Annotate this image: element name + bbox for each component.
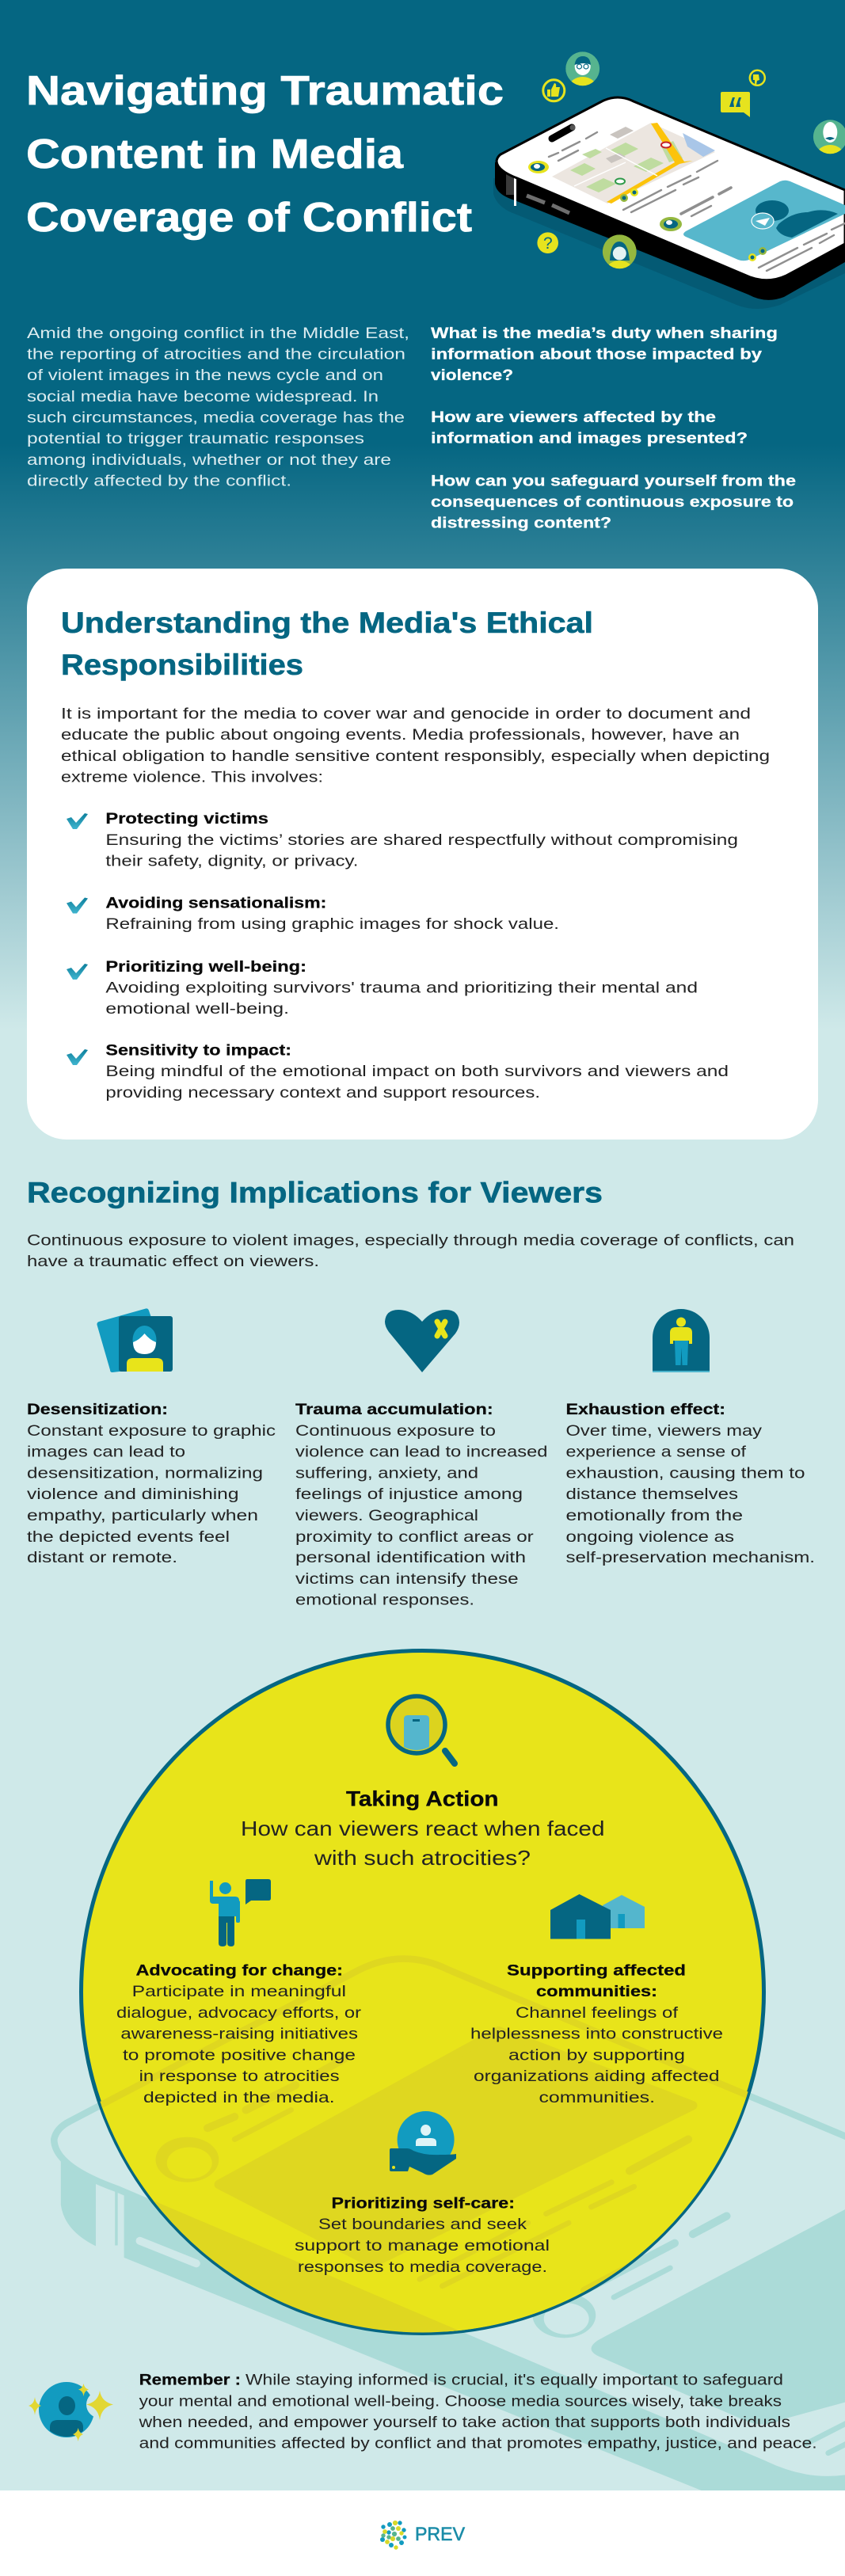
column: desensitization: empathy, particularly when: [27, 1507, 258, 1524]
column: trauma accumulation: emotional responses.: [295, 1592, 474, 1609]
icon: houses: [550, 1894, 645, 1939]
column: desensitization: desensitization, normalizing: [27, 1465, 263, 1482]
item: protecting victims: Protecting victims: [105, 810, 268, 828]
remember text: when needed, and empower yourself to take action that supports both individuals: [138, 2414, 790, 2431]
column: trauma accumulation: feelings of injustice among: [295, 1486, 523, 1503]
column: trauma accumulation: personal identification with: [295, 1549, 526, 1566]
block: supporting affected communities: communities:: [536, 1983, 657, 2000]
notch: [552, 127, 572, 139]
block: supporting affected communities: organizations aiding affected: [474, 2068, 719, 2085]
block: supporting affected communities: Channel feelings of: [516, 2004, 679, 2022]
column: exhaustion effect: emotionally from the: [565, 1507, 743, 1524]
intro text: of violent images in the news cycle and on: [27, 367, 383, 384]
block: advocating for change: awareness-raising initiatives: [120, 2026, 358, 2043]
block: advocating for change: dialogue, advocacy efforts, or: [116, 2004, 362, 2022]
intro text: Amid the ongoing conflict in the Middle East,: [27, 325, 409, 342]
icon: question mark: ?: [543, 234, 553, 253]
block: advocating for change: depicted in the media.: [143, 2089, 335, 2106]
item: avoiding sensationalism: Avoiding sensationalism:: [105, 894, 326, 911]
intro text: the reporting of atrocities and the circulation: [27, 346, 405, 363]
item: sensitivity to impact: Being mindful of the emotional impact on both survivors and viewers and: [105, 1063, 729, 1080]
item: sensitivity to impact: Sensitivity to impact:: [105, 1042, 291, 1060]
logo: PREV: [380, 2521, 465, 2550]
block: advocating for change: to promote positive change: [123, 2047, 356, 2064]
taking action heading: [241, 1786, 605, 1870]
key questions: information and images presented?: [431, 430, 748, 447]
key questions: How can you safeguard yourself from the: [431, 472, 796, 489]
icon: thumbs up: [543, 80, 565, 101]
column: exhaustion effect: exhaustion, causing them to: [565, 1465, 805, 1482]
side buttons: [527, 196, 569, 213]
map: [552, 123, 715, 204]
column: desensitization: images can lead to: [27, 1444, 185, 1461]
item: protecting victims: their safety, dignity, or privacy.: [105, 853, 358, 870]
column: exhaustion effect: [565, 1401, 815, 1566]
icon: person with sparkles: [29, 2382, 113, 2441]
background phone watermark: [54, 1959, 845, 2536]
phone body: [495, 162, 845, 300]
illustration: isometric phone: [493, 97, 845, 309]
icon: exhausted person in arch: [653, 1309, 710, 1372]
column: desensitization: distant or remote.: [27, 1549, 177, 1566]
icon: advocate with speech bubble: [210, 1879, 271, 1946]
column: exhaustion effect: self-preservation mechanism.: [565, 1549, 815, 1566]
column: exhaustion effect: ongoing violence as: [565, 1528, 734, 1546]
column: exhaustion effect: distance themselves: [565, 1486, 738, 1503]
column: desensitization: [27, 1401, 276, 1566]
intro text: [27, 325, 409, 489]
title: Coverage of Conflict: [26, 195, 472, 241]
remember text: [138, 2371, 817, 2452]
phone shadow: [493, 178, 845, 309]
item: protecting victims: [67, 810, 738, 870]
intro text: such circumstances, media coverage has the: [27, 409, 405, 426]
icon: question mark: [537, 232, 558, 253]
item: prioritizing well-being: emotional well-being.: [105, 1000, 289, 1018]
intro text: potential to trigger traumatic responses: [27, 430, 364, 447]
column: trauma accumulation: Continuous exposure to: [295, 1422, 496, 1440]
column: trauma accumulation: suffering, anxiety, and: [295, 1465, 478, 1482]
column: trauma accumulation: [295, 1401, 547, 1609]
block: supporting affected communities: communities.: [539, 2089, 655, 2106]
panel: ethical responsibilities: [27, 569, 818, 1140]
block: advocating for change: Advocating for change:: [136, 1961, 343, 1979]
block: advocating for change: in response to atrocities: [139, 2068, 340, 2085]
phone screen: [497, 97, 845, 280]
key questions: What is the media’s duty when sharing: [431, 325, 778, 342]
icon: photo cards: [97, 1308, 173, 1372]
block: supporting affected communities: [470, 1961, 723, 2106]
icon: heart with bandage: [385, 1310, 459, 1372]
circle: taking action background: [81, 1650, 763, 2333]
logo: PREV: PREV: [415, 2524, 465, 2545]
intro paragraph: ethical obligation to handle sensitive content responsibly, especially when depicting: [61, 748, 770, 765]
remember text: and communities affected by conflict and that promotes empathy, justice, and peace.: [139, 2434, 817, 2452]
intro text: among individuals, whether or not they are: [27, 451, 391, 469]
column: exhaustion effect: Exhaustion effect:: [565, 1401, 725, 1418]
implications intro: Continuous exposure to violent images, especially through media coverage of conflicts, can: [27, 1232, 794, 1250]
heading: implications for viewers: Recognizing Implications for Viewers: [27, 1177, 603, 1208]
block: supporting affected communities: helplessness into constructive: [470, 2026, 723, 2043]
column: trauma accumulation: viewers. Geographical: [295, 1507, 478, 1524]
intro text: social media have become widespread. In: [27, 388, 379, 405]
post avatars: [528, 161, 767, 261]
column: exhaustion effect: Over time, viewers may: [565, 1422, 762, 1440]
block: prioritizing self-care: Prioritizing self-care:: [331, 2195, 515, 2213]
remember text: Remember :: [139, 2371, 241, 2388]
key questions: consequences of continuous exposure to: [431, 493, 794, 511]
heading: Understanding the Media's Ethical: [61, 607, 593, 639]
key questions: distressing content?: [431, 515, 611, 532]
column: desensitization: violence and diminishing: [27, 1486, 239, 1503]
column: desensitization: Constant exposure to graphic: [27, 1422, 276, 1440]
title: Navigating Traumatic: [26, 68, 504, 114]
item: protecting victims: Ensuring the victims’ stories are shared respectfully without compromising: [105, 831, 738, 849]
intro paragraph: educate the public about ongoing events. Media professionals, however, have an: [61, 726, 740, 744]
title: [26, 68, 504, 241]
column: exhaustion effect: experience a sense of: [565, 1444, 747, 1461]
icon: avatar with mask: [602, 234, 637, 269]
icon: avatar with glasses: [565, 51, 600, 86]
icon: hand holding person: [390, 2111, 456, 2175]
title: Content in Media: [26, 131, 404, 177]
implications intro: have a traumatic effect on viewers.: [27, 1253, 319, 1270]
column: desensitization: the depicted events feel: [27, 1528, 230, 1546]
watermark inside circle: [100, 1956, 748, 2333]
column: trauma accumulation: Trauma accumulation:: [295, 1401, 493, 1418]
item: avoiding sensationalism: Refraining from using graphic images for shock value.: [105, 915, 559, 933]
placeholder text lines: [549, 132, 845, 271]
column: trauma accumulation: violence can lead to increased: [295, 1444, 547, 1461]
key questions: [431, 325, 796, 532]
intro paragraph: It is important for the media to cover war and genocide in order to document and: [61, 705, 751, 722]
taking action heading: Taking Action: [346, 1786, 499, 1810]
item: prioritizing well-being: [67, 958, 698, 1018]
implications intro: [27, 1232, 794, 1270]
item: sensitivity to impact: [67, 1042, 729, 1102]
video panel: [683, 181, 845, 261]
item: prioritizing well-being: Avoiding exploiting survivors' trauma and prioritizing their mental and: [105, 980, 698, 997]
column: trauma accumulation: proximity to conflict areas or: [295, 1528, 534, 1546]
heading: Responsibilities: [61, 649, 303, 681]
column: desensitization: Desensitization:: [27, 1401, 168, 1418]
remember text: your mental and emotional well-being. Choose media sources wisely, take breaks: [139, 2393, 782, 2410]
intro paragraph: [61, 705, 770, 786]
taking action heading: with such atrocities?: [314, 1846, 531, 1870]
block: prioritizing self-care: support to manage emotional: [295, 2237, 550, 2254]
intro text: directly affected by the conflict.: [27, 472, 291, 489]
item: sensitivity to impact: providing necessary context and support resources.: [105, 1084, 540, 1102]
block: prioritizing self-care: responses to media coverage.: [298, 2258, 547, 2276]
taking action heading: How can viewers react when faced: [241, 1817, 605, 1840]
key questions: violence?: [431, 367, 513, 384]
block: advocating for change: [116, 1961, 362, 2106]
icon: thumbs down: [750, 70, 765, 86]
icon: quote bubble: [721, 92, 750, 117]
block: supporting affected communities: action by supporting: [508, 2047, 685, 2064]
heading: [61, 607, 593, 681]
column: trauma accumulation: victims can intensify these: [295, 1570, 519, 1588]
key questions: How are viewers affected by the: [431, 409, 716, 426]
block: prioritizing self-care: Set boundaries and seek: [318, 2216, 527, 2233]
item: prioritizing well-being: Prioritizing well-being:: [105, 958, 306, 976]
key questions: information about those impacted by: [431, 346, 762, 363]
remember text: While staying informed is crucial, it's equally important to safeguard: [246, 2371, 783, 2388]
intro paragraph: extreme violence. This involves:: [61, 768, 323, 786]
block: advocating for change: Participate in meaningful: [132, 1983, 346, 2000]
icon: magnifier over phone: [388, 1696, 455, 1764]
item: avoiding sensationalism: [67, 894, 559, 933]
block: supporting affected communities: Supporting affected: [507, 1961, 686, 1979]
icon: avatar with moustache: [813, 120, 845, 154]
footer band: [0, 2490, 845, 2576]
block: prioritizing self-care: [295, 2195, 550, 2276]
